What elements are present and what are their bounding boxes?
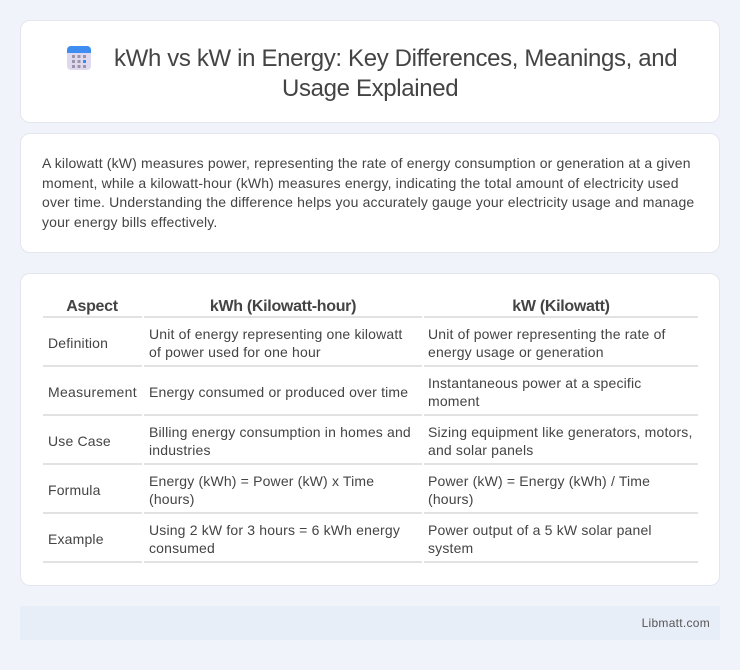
row: use case: Use Case	[48, 433, 111, 449]
row: definition: of power used for one hour	[149, 344, 321, 360]
panel: title card	[20, 20, 720, 123]
intro paragraph: over time. Understanding the difference helps you accurately gauge your electricity usage and manage	[42, 194, 694, 210]
intro paragraph: your energy bills effectively.	[42, 214, 217, 230]
icon: calendar	[67, 46, 91, 70]
row: measurement: Energy consumed or produced over time	[149, 384, 408, 400]
row: example	[48, 522, 652, 556]
row: formula	[48, 473, 650, 507]
row: definition	[48, 326, 666, 360]
table header	[66, 298, 610, 315]
row: use case: Sizing equipment like generators, motors,	[428, 424, 693, 440]
row: use case: Billing energy consumption in homes and	[149, 424, 411, 440]
table header: Aspect	[66, 298, 118, 315]
row: example: consumed	[149, 540, 215, 556]
row: example: Using 2 kW for 3 hours = 6 kWh energy	[149, 522, 400, 538]
row: definition: Unit of power representing the rate of	[428, 326, 666, 342]
row: measurement	[48, 375, 641, 409]
title: kWh vs kW in Energy: Key Differences, Meanings, and	[114, 45, 677, 72]
row: formula: Energy (kWh) = Power (kW) x Time	[149, 473, 374, 489]
row: formula: (hours)	[428, 491, 474, 507]
table header: kW (Kilowatt)	[512, 298, 610, 315]
title	[114, 45, 677, 102]
row: definition: Definition	[48, 335, 108, 351]
table header: kWh (Kilowatt-hour)	[210, 298, 356, 315]
row: measurement: Measurement	[48, 384, 137, 400]
row: use case	[48, 424, 693, 458]
panel: comparison table	[20, 273, 720, 586]
row: example: Example	[48, 531, 104, 547]
row: example: Power output of a 5 kW solar panel	[428, 522, 652, 538]
intro paragraph: A kilowatt (kW) measures power, representing the rate of energy consumption or generation at a given	[42, 155, 691, 171]
row: measurement: moment	[428, 393, 480, 409]
intro paragraph: moment, while a kilowatt-hour (kWh) measures energy, indicating the total amount of electricity used	[42, 174, 679, 190]
row: measurement: Instantaneous power at a specific	[428, 375, 641, 391]
row: use case: industries	[149, 442, 211, 458]
intro paragraph	[42, 155, 694, 230]
row: example: system	[428, 540, 473, 556]
row: definition: energy usage or generation	[428, 344, 604, 360]
row: formula: Formula	[48, 482, 101, 498]
row: formula: Power (kW) = Energy (kWh) / Time	[428, 473, 650, 489]
footer	[20, 606, 720, 640]
footer credit: Libmatt.com	[642, 616, 710, 630]
title: Usage Explained	[282, 75, 458, 102]
panel: intro text	[20, 133, 720, 253]
row: formula: (hours)	[149, 491, 195, 507]
row: use case: and solar panels	[428, 442, 533, 458]
row: definition: Unit of energy representing one kilowatt	[149, 326, 402, 342]
